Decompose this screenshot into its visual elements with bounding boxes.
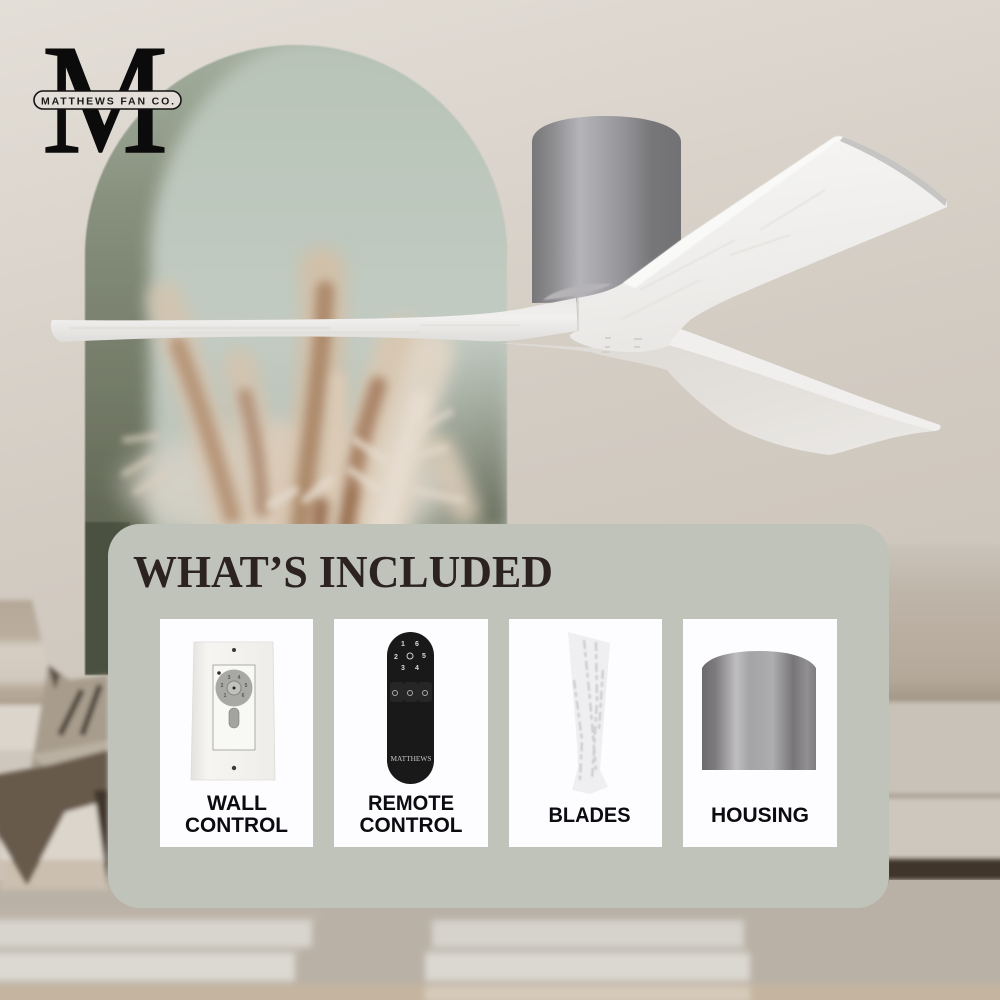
icon: housing (702, 651, 816, 770)
heading: WHAT’S INCLUDED (133, 546, 553, 597)
icon: remote: 5 (422, 653, 426, 660)
label: HOUSING (711, 804, 809, 827)
left blade (51, 298, 578, 342)
icon: remote: 1 (401, 641, 405, 648)
panel: what's included (108, 524, 889, 908)
right sofa (885, 545, 1000, 859)
label: REMOTE (368, 792, 454, 815)
card: wall control (160, 619, 313, 847)
card: remote control (334, 619, 488, 847)
icon: wall control plate: 2 (221, 683, 224, 689)
icon: remote: MATTHEWS (390, 755, 432, 763)
icon: remote: 4 (415, 665, 419, 672)
logo: Matthews Fan Co.: MATTHEWS FAN CO. (41, 96, 174, 108)
ceiling fan (51, 116, 947, 455)
icon: wall control plate (191, 642, 275, 780)
label (360, 792, 463, 837)
label (185, 792, 288, 837)
lower right blade (500, 327, 940, 455)
floor (0, 880, 1000, 1000)
card: housing (683, 619, 837, 847)
icon: remote (387, 632, 434, 784)
icon: wall control plate: 6 (242, 693, 245, 699)
pampas grass (124, 270, 465, 545)
icon: wall control plate: 5 (245, 683, 248, 689)
fan housing (532, 116, 681, 303)
icon: wall control plate: 3 (228, 675, 231, 681)
arched niche (85, 40, 530, 680)
icon: remote: 2 (394, 654, 398, 661)
label: CONTROL (360, 814, 463, 837)
label: BLADES (548, 804, 630, 827)
card: blades (509, 619, 662, 847)
icon: wall control plate: 4 (238, 675, 241, 681)
logo: Matthews Fan Co.: M (42, 12, 168, 186)
icon: remote: 3 (401, 665, 405, 672)
icon: remote: 6 (415, 641, 419, 648)
icon: blade (568, 632, 610, 794)
icon: wall control plate: 1 (224, 693, 227, 699)
label: CONTROL (185, 814, 288, 837)
upper right blade and hub (570, 136, 947, 352)
left sofa and throw (0, 600, 108, 885)
label: WALL (207, 792, 267, 815)
